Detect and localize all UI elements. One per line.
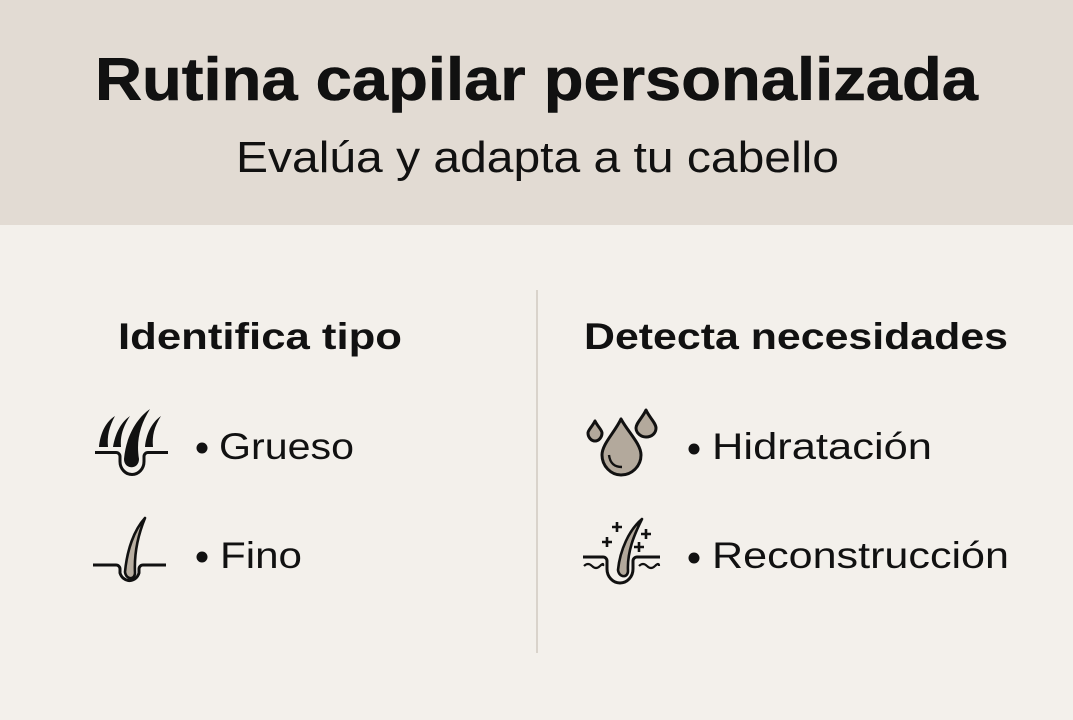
panel: identifica tipo <box>93 316 402 581</box>
label: hidratación: Hidratación <box>712 426 932 467</box>
bullet: reconstrucción <box>688 552 700 564</box>
bullet: fino <box>196 552 208 562</box>
heading: detecta necesidades: Detecta necesidades <box>584 316 1008 357</box>
label: grueso: Grueso <box>219 426 354 467</box>
panel: detecta necesidades <box>583 316 1009 583</box>
heading: identifica tipo: Identifica tipo <box>118 316 402 357</box>
title: Rutina capilar personalizada <box>95 46 979 113</box>
label: reconstrucción: Reconstrucción <box>712 535 1009 576</box>
icon: water drops <box>588 410 656 475</box>
bullet: hidratación <box>688 444 700 454</box>
subtitle: Evalúa y adapta a tu cabello <box>236 133 839 182</box>
icon: thick hair <box>95 409 168 474</box>
icon: hair reconstruction <box>583 519 660 583</box>
label: fino: Fino <box>220 535 302 576</box>
header band <box>0 0 1073 225</box>
bullet: grueso <box>196 442 208 454</box>
icon: fine hair <box>93 518 166 581</box>
